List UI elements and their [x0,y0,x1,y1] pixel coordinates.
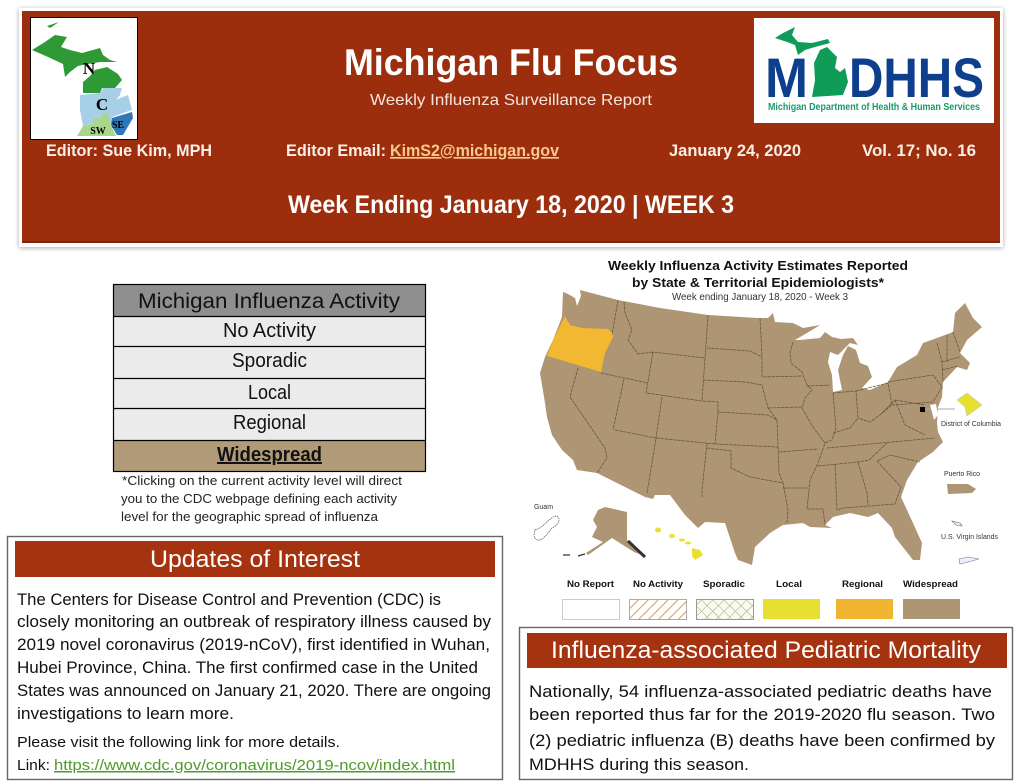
panel: Michigan influenza activity table: No Activity [223,320,316,342]
map legend: Sporadic [703,579,745,590]
icon: Michigan regions map logo: C [96,95,108,114]
icon: Michigan regions map logo [30,18,138,140]
panel: Michigan influenza activity table [113,284,426,472]
map: Puerto Rico: Puerto Rico [944,471,980,478]
map: District of Columbia inset: District of Columbia [941,421,1001,428]
map: District of Columbia inset [941,393,1001,428]
title: Michigan Flu Focus [344,42,678,83]
icon: MDHHS logo: M [765,46,808,109]
map legend: Local [776,579,802,590]
header banner [19,8,1003,247]
text block: pediatric deaths: MDHHS during this season. [529,755,749,774]
map: Alaska [586,507,642,555]
text block: pediatric deaths: Nationally, 54 influenza-associated pediatric deaths have [529,682,992,701]
map title: by State & Territorial Epidemiologists* [632,275,885,290]
panel: Michigan influenza activity table: Regional [233,412,306,434]
map legend [562,579,960,620]
heading: pediatric mortality [527,633,1007,668]
panel: Michigan influenza activity table: Widespread [217,444,322,466]
text block: pediatric deaths [529,682,996,774]
map: contiguous states [534,290,1001,620]
map legend: No Report [567,579,615,590]
icon: MDHHS logo: Michigan Department of Health & Human Services [768,102,980,113]
map legend: Widespread [903,579,958,590]
map: DC locator [920,407,925,412]
editor line [46,142,976,160]
editor line: Editor Email: [286,142,386,160]
panel: Updates of Interest [8,536,502,780]
icon: MDHHS logo: DHHS [849,46,984,109]
panel: Michigan influenza activity table: Local [248,382,291,404]
text block: link: https://www.cdc.gov/coronavirus/2019-ncov/index.html [54,757,455,774]
editor line: January 24, 2020 [669,142,801,160]
panel: US flu activity map [8,258,1012,780]
editor line: KimS2@michigan.gov [390,142,560,160]
text block: pediatric deaths: been reported thus far for the 2019-2020 flu season. Two [529,705,995,724]
map: Guam [534,504,559,540]
map: Hawaii [655,528,703,560]
map: Puerto Rico [944,471,980,494]
panel: Michigan influenza activity table: Sporadic [232,350,307,372]
editor line: Editor: Sue Kim, MPH [46,142,212,160]
text block: activity level note [121,473,402,524]
text block: activity level note: you to the CDC webpage defining each activity [121,491,398,506]
icon: Michigan regions map logo: SW [90,126,106,137]
text block: link: Link: [17,757,50,774]
text block: activity level note: *Clicking on the current activity level will direct [122,473,402,488]
map legend: No Activity [633,579,684,590]
text block: link [17,734,455,774]
map legend: Regional [842,579,883,590]
text block: coronavirus update: Hubei Province, China. The first confirmed case in the United [17,658,478,677]
icon: Michigan regions map logo: SE [112,120,124,131]
panel: Michigan influenza activity table: Michigan Influenza Activity [138,290,401,313]
heading: Updates of Interest [15,541,495,577]
map: Guam: Guam [534,504,553,511]
text block: link: Please visit the following link for more details. [17,734,340,751]
text block: coronavirus update: States was announced on January 21, 2020. There are ongoing [17,681,491,700]
map: Oregon regional [547,316,614,372]
week ending heading: Week Ending January 18, 2020 | WEEK 3 [288,191,734,219]
icon: MDHHS logo [754,18,994,123]
subtitle: Weekly Influenza Surveillance Report [370,92,653,109]
panel: Influenza-associated Pediatric Mortality [520,628,1012,780]
editor line: Vol. 17; No. 16 [862,142,976,160]
heading: pediatric mortality: Influenza-associated Pediatric Mortality [551,637,981,664]
map: U.S. Virgin Islands: U.S. Virgin Islands [941,534,998,541]
state borders [570,300,960,525]
map: U.S. Virgin Islands [941,521,998,564]
heading: Updates of Interest: Updates of Interest [150,546,360,573]
text block: coronavirus update: investigations to learn more. [17,704,234,723]
text block: coronavirus update [17,590,491,723]
map title [608,258,908,303]
text block: coronavirus update: 2019 novel coronavirus (2019-nCoV), first identified in Wuhan, [17,635,490,654]
text block: pediatric deaths: (2) pediatric influenza (B) deaths have been confirmed by [529,731,996,750]
icon: Michigan regions map logo: N [83,59,96,78]
text block: activity level note: level for the geographic spread of influenza [121,509,379,524]
text block: coronavirus update: closely monitoring an outbreak of respiratory illness caused by [17,612,491,631]
text block: coronavirus update: The Centers for Disease Control and Prevention (CDC) is [17,590,441,609]
map title: Weekly Influenza Activity Estimates Reported [608,258,908,273]
map title: Week ending January 18, 2020 - Week 3 [672,292,848,303]
